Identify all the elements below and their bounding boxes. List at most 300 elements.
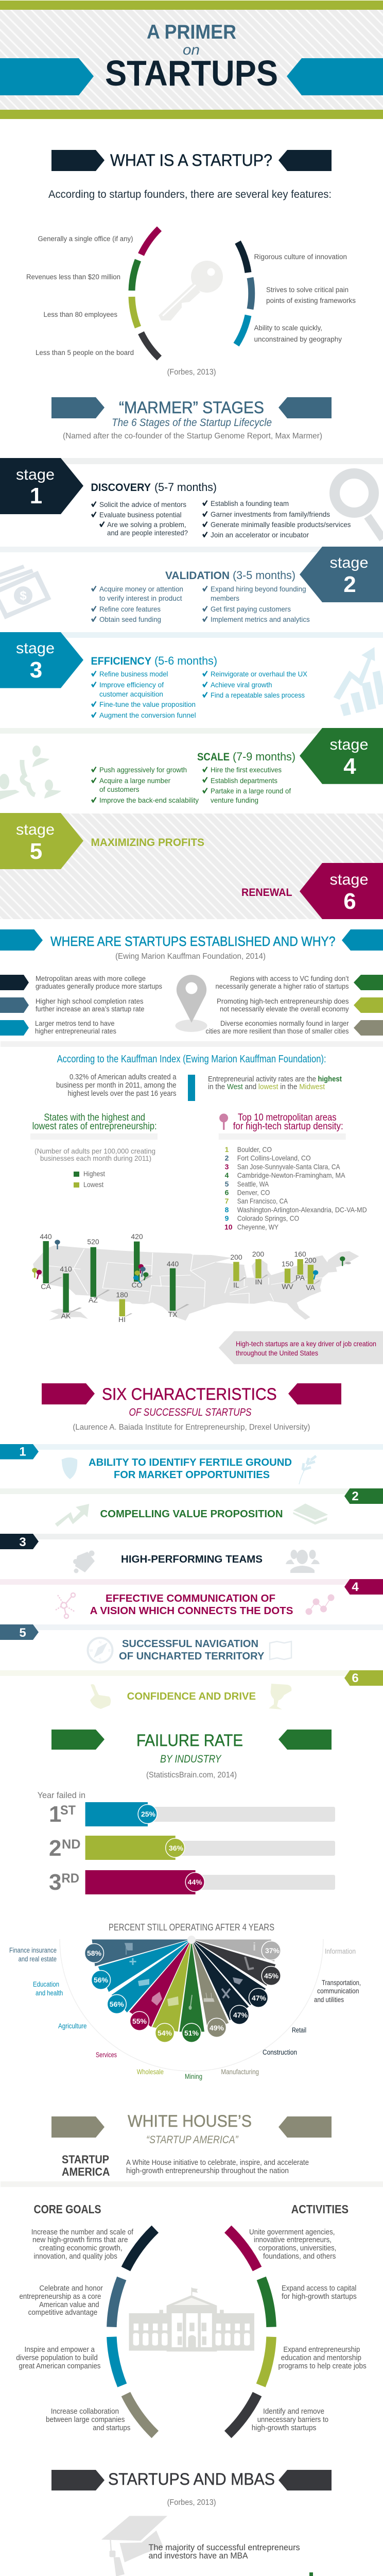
activities text: unnecessary barriers to: [257, 2416, 328, 2424]
bar values: AK: [61, 1312, 71, 1320]
core goals text: creating economic growth,: [39, 2244, 123, 2252]
right factors: necessarily generate a higher ratio of startups: [215, 982, 349, 990]
icon: connected dots: [306, 1594, 335, 1615]
heading: marmer stages: [51, 397, 332, 440]
bar values: VA: [306, 1283, 315, 1292]
panel: stage 1 discovery: Solicit the advice of mentors: [99, 500, 186, 509]
states heading: States with the highest and: [44, 1112, 145, 1123]
key features ring: [132, 229, 252, 358]
icon: puzzle piece: [73, 1551, 95, 1573]
title text: A PRIMER: [147, 21, 236, 43]
industry labels: and utilities: [314, 1996, 344, 2004]
icon: magnifier: [335, 473, 383, 539]
heading: failure rate: BY INDUSTRY: [160, 1753, 222, 1765]
panel: stage 4 scale: SCALE: [197, 751, 230, 763]
panel: stage 2 validation: members: [211, 594, 239, 602]
icon: map: [270, 1641, 291, 1659]
activities text: [249, 2228, 367, 2432]
top 10 metros: 4: [225, 1171, 229, 1179]
kauffman facts: Entrepreneurial activity rates are the highest: [208, 1075, 342, 1083]
bar values: CO: [132, 1281, 143, 1289]
icon: compass: N: [99, 1641, 101, 1645]
top 10 metros: 2: [225, 1154, 229, 1162]
characteristic 5: 5: [19, 1626, 26, 1640]
title text: [105, 21, 278, 93]
map shape: [33, 1245, 359, 1320]
characteristic 1: FOR MARKET OPPORTUNITIES: [114, 1469, 270, 1481]
characteristic 3: [0, 1534, 383, 1573]
core goals text: entrepreneurship as a core: [20, 2293, 101, 2301]
industry labels: [9, 1946, 361, 2080]
core goals text: great American companies: [19, 2362, 101, 2370]
key feature labels: Less than 80 employees: [43, 311, 117, 318]
bar values: 160: [294, 1250, 306, 1258]
mba majority statement: [148, 2543, 300, 2561]
panel: stage 2 validation: Get first paying customers: [211, 605, 291, 613]
kauffman facts: 0.32% of American adults created a: [69, 1073, 177, 1081]
panel: stage 2 validation: stage: [329, 554, 369, 571]
icon: rising arrow: [55, 1504, 89, 1527]
radial chart: percent still operating: 55%: [132, 2017, 147, 2025]
activities text: programs to help create jobs: [278, 2362, 367, 2370]
intro text: According to startup founders, there are several key features:: [48, 189, 332, 200]
activities text: Identify and remove: [263, 2408, 324, 2416]
core goals text: and startups: [93, 2424, 130, 2432]
panel: stage 2 validation: (3-5 months): [233, 569, 295, 582]
row: second year: 36%: [169, 1844, 184, 1852]
startup america description: [62, 2153, 309, 2178]
panel: stage 4 scale: (7-9 months): [233, 750, 295, 763]
panel: stage 1 discovery: [0, 458, 383, 539]
activities text: Expand entrepreneurship: [283, 2346, 360, 2354]
left factors: [0, 975, 162, 1036]
right factors: Regions with access to VC funding don’t: [230, 975, 349, 982]
bar values: 420: [131, 1232, 143, 1241]
heading: failure rate: (StatisticsBrain.com, 2014): [146, 1771, 237, 1780]
icon: team of people: [286, 1550, 320, 1573]
icon: network: [56, 1593, 75, 1618]
radial chart: percent still operating: 51%: [184, 2029, 199, 2037]
industry labels: Construction: [263, 2048, 297, 2056]
row: second year: 2: [49, 1836, 61, 1861]
radial chart: percent still operating: 54%: [158, 2029, 172, 2037]
bar values: 200: [230, 1253, 242, 1261]
kauffman facts: [56, 1073, 342, 1101]
row: first year: ST: [60, 1803, 76, 1818]
industry labels: Manufacturing: [221, 2068, 259, 2076]
stage 5 maximizing profits: [0, 813, 204, 869]
core goals text: Increase the number and scale of: [31, 2228, 134, 2236]
heading: startups and mbas: [51, 2470, 332, 2507]
right factors: cities are more resilient than those of smaller cities: [206, 1027, 349, 1035]
map pins: [32, 1240, 351, 1283]
panel: stage 3 efficiency: stage: [16, 640, 55, 657]
radial chart heading: PERCENT STILL OPERATING AFTER 4 YEARS: [109, 1922, 274, 1933]
top 10 metros: Cambridge-Newton-Framingham, MA: [237, 1171, 345, 1179]
row: first year: 1: [49, 1802, 61, 1827]
bar values: CA: [41, 1282, 51, 1291]
characteristic 4: EFFECTIVE COMMUNICATION OF: [106, 1593, 275, 1604]
icon: compass: W: [90, 1649, 93, 1653]
left factors: Metropolitan areas with more college: [36, 975, 146, 982]
row: third year: [49, 1870, 335, 1895]
stage 6 renewal: RENEWAL: [241, 887, 292, 899]
characteristic 6: CONFIDENCE AND DRIVE: [127, 1691, 256, 1702]
panel: stage 2 validation: VALIDATION: [165, 570, 230, 582]
key feature labels: Strives to solve critical pain: [266, 286, 349, 294]
industry labels: and health: [36, 1989, 63, 1997]
icon: thumbs up: [90, 1684, 111, 1709]
bar values: [40, 1232, 317, 1324]
citation: (Forbes, 2013): [167, 368, 216, 377]
wedge icons: i: [253, 1940, 256, 1953]
icon: banknote: $: [20, 589, 27, 603]
kauffman facts: business per month in 2011, among the: [56, 1081, 177, 1090]
core goals text: innovation, and quality jobs: [34, 2252, 117, 2261]
column headings: [34, 2202, 349, 2216]
core goals text: diverse population to build: [16, 2354, 98, 2362]
panel: stage 2 validation: Refine core features: [99, 605, 161, 613]
top 10 metros: [219, 1112, 367, 1231]
heading: where are startups established: [0, 929, 383, 961]
bar values: 410: [60, 1265, 72, 1273]
key feature labels: points of existing frameworks: [266, 297, 356, 304]
panel: stage 3 efficiency: customer acquisition: [99, 690, 163, 698]
heading: white house: “STARTUP AMERICA”: [146, 2134, 238, 2146]
bars: [43, 1241, 176, 1313]
top 10 metros: Colorado Springs, CO: [237, 1214, 299, 1223]
bar values: WV: [282, 1282, 293, 1291]
heading: white house: WHITE HOUSE’S: [128, 2112, 252, 2130]
industry labels: Finance insurance: [9, 1946, 57, 1954]
radial chart: percent still operating: 56%: [110, 2000, 124, 2008]
heading: failure rate: [51, 1730, 332, 1780]
ring: core goals and activities: [112, 2229, 271, 2434]
bar values: TX: [168, 1310, 178, 1318]
left factors: further increase an area’s startup rate: [36, 1005, 144, 1013]
panel: stage 4 scale: stage: [329, 736, 369, 753]
bar values: 520: [87, 1238, 99, 1246]
bar values: 440: [40, 1232, 52, 1241]
kauffman index heading: According to the Kauffman Index (Ewing Marion Kauffman Foundation):: [57, 1054, 326, 1065]
panel: stage 4 scale: Partake in a large round of: [211, 787, 291, 795]
top 10 metros: for high-tech startup density:: [233, 1121, 343, 1132]
icon: pink pin: [219, 1114, 228, 1130]
bar chart: year failed: Year failed in: [38, 1790, 85, 1800]
bar values: 150: [282, 1260, 293, 1268]
industry labels: Wholesale: [137, 2068, 164, 2076]
core goals text: Increase collaboration: [51, 2408, 119, 2416]
startup america description: STARTUP: [62, 2153, 109, 2166]
activities text: for high-growth startups: [282, 2293, 357, 2301]
characteristic 6: 6: [352, 1671, 359, 1685]
panel: stage 1 discovery: Generate minimally feasible products/services: [211, 520, 351, 529]
icon: trophy: [269, 1684, 291, 1709]
mba majority statement: and investors have an MBA: [148, 2551, 248, 2561]
wedge icons: [125, 1940, 256, 2010]
kauffman facts: in the West and lowest in the Midwest: [208, 1082, 325, 1091]
panel: stage 3 efficiency: Fine-tune the value proposition: [99, 700, 196, 708]
bar values: AZ: [89, 1296, 98, 1304]
characteristic 1: ABILITY TO IDENTIFY FERTILE GROUND: [89, 1457, 292, 1468]
industry labels: Agriculture: [58, 2022, 86, 2030]
mba majority statement: The majority of successful entrepreneurs: [148, 2543, 300, 2552]
fact: research access: [205, 2572, 383, 2576]
industry labels: Retail: [292, 2026, 306, 2034]
characteristic 5: OF UNCHARTED TERRITORY: [119, 1651, 265, 1662]
column headings: ACTIVITIES: [291, 2202, 349, 2216]
characteristic 2: [0, 1488, 383, 1527]
heading: white house: [51, 2112, 332, 2146]
core goals text: between large companies: [46, 2416, 125, 2424]
industry labels: communication: [317, 1987, 359, 1995]
states heading: (Number of adults per 100,000 creating: [34, 1147, 155, 1155]
industry labels: Education: [33, 1980, 59, 1988]
us map with state bars: [32, 1232, 359, 1324]
panel: stage 3 efficiency: 3: [30, 657, 42, 683]
legend: [74, 1170, 105, 1189]
heading: six characteristics: [42, 1383, 341, 1432]
stage 5 maximizing profits: 5: [30, 839, 42, 864]
title text: on: [183, 42, 200, 58]
icon: graduation cap: [101, 2516, 167, 2576]
top 10 metros: Cheyenne, WY: [237, 1223, 279, 1231]
row: third year: 44%: [188, 1878, 202, 1886]
panel: stage 1 discovery: DISCOVERY: [91, 482, 151, 494]
stage 5 maximizing profits: MAXIMIZING PROFITS: [91, 837, 204, 849]
title banner: [0, 0, 383, 120]
radial chart: percent still operating: [9, 1936, 361, 2080]
panel: stage 3 efficiency: Reinvigorate or overhaul the UX: [211, 670, 308, 678]
panel: stage 4 scale: Acquire a large number: [99, 776, 170, 785]
icon: money stack: [293, 1503, 328, 1524]
heading: startups and mbas: (Forbes, 2013): [167, 2498, 216, 2507]
panel: stage 1 discovery: Evaluate business potential: [99, 511, 182, 519]
kauffman facts: highest levels over the past 16 years: [68, 1089, 176, 1098]
bar values: 200: [304, 1256, 317, 1264]
characteristic 1: 1: [19, 1445, 26, 1459]
panel: stage 3 efficiency: Refine business model: [99, 670, 168, 678]
icon: white house: [129, 2287, 254, 2351]
activities text: high-growth startups: [252, 2424, 316, 2432]
startup america description: AMERICA: [62, 2165, 110, 2178]
industry labels: Services: [96, 2051, 117, 2059]
industry labels: Transportation,: [322, 1979, 361, 1987]
industry labels: Information: [325, 1947, 356, 1955]
icon: compass: [88, 1638, 112, 1663]
panel: stage 3 efficiency: Augment the conversion funnel: [99, 711, 196, 719]
heading: six characteristics: SIX CHARACTERISTICS: [102, 1385, 277, 1403]
heading: where are startups established: WHERE ARE STARTUPS ESTABLISHED AND WHY?: [50, 934, 336, 949]
icon: banknote: [0, 565, 51, 619]
panel: stage 1 discovery: (5-7 months): [154, 481, 217, 494]
top 10 metros: 9: [225, 1214, 229, 1223]
row: first year: [49, 1802, 335, 1827]
callout: job creation: [219, 1331, 383, 1364]
panel: stage 4 scale: venture funding: [211, 796, 258, 804]
key feature labels: Less than 5 people on the board: [36, 349, 134, 357]
bar values: HI: [118, 1315, 126, 1324]
bar values: 200: [252, 1250, 264, 1258]
icon: key: [159, 261, 223, 320]
title text: STARTUPS: [105, 53, 278, 93]
heading: what is a startup: WHAT IS A STARTUP?: [110, 151, 272, 170]
startup america description: A White House initiative to celebrate, inspire, and accelerate: [126, 2158, 309, 2167]
states heading: [30, 1112, 158, 1162]
panel: stage 2 validation: Obtain seed funding: [99, 615, 161, 623]
top 10 metros: San Francisco, CA: [237, 1197, 288, 1205]
wedge icons: +: [129, 1954, 137, 1969]
panel: stages 5 and 6: [0, 813, 383, 919]
bar values: PA: [295, 1274, 305, 1282]
panel: stage 4 scale: Improve the back-end scalability: [99, 796, 199, 804]
key feature labels: Generally a single office (if any): [38, 235, 133, 243]
top 10 metros: 8: [225, 1206, 229, 1214]
row: second year: ND: [62, 1837, 80, 1852]
radial chart: percent still operating: 37%: [265, 1946, 280, 1955]
left factors: graduates generally produce more startups: [36, 982, 162, 990]
panel: stage 2 validation: Acquire money or attention: [99, 585, 183, 593]
panel: stage 4 scale: Establish departments: [211, 776, 277, 785]
panel: stage 1 discovery: Are we solving a problem,: [107, 520, 186, 529]
characteristic 4: [0, 1579, 383, 1618]
characteristic 4: 4: [352, 1580, 359, 1594]
core goals text: new high-growth firms that are: [32, 2236, 128, 2244]
radial chart: percent still operating: 47%: [252, 1994, 267, 2002]
core goals text: Celebrate and honor: [39, 2284, 103, 2293]
core goals text: American value and: [39, 2301, 99, 2309]
panel: stage 3 efficiency: EFFICIENCY: [91, 655, 151, 667]
characteristic 4: A VISION WHICH CONNECTS THE DOTS: [90, 1605, 293, 1617]
panel: stage 2 validation: [0, 547, 383, 623]
icon: acorn: [62, 1458, 77, 1479]
key feature labels: Ability to scale quickly,: [254, 324, 322, 332]
top 10 metros: Top 10 metropolitan areas: [238, 1112, 337, 1123]
heading: marmer stages: “MARMER” STAGES: [119, 398, 264, 417]
heading: failure rate: FAILURE RATE: [136, 1731, 243, 1750]
icon: compass: S: [99, 1658, 101, 1662]
heading: what is a startup: [51, 150, 332, 171]
wedges: [92, 1939, 276, 2032]
left factors: Higher high school completion rates: [36, 997, 144, 1005]
characteristic 3: 3: [19, 1535, 26, 1549]
radial chart: percent still operating: 56%: [94, 1976, 109, 1984]
panel: stage 4 scale: 4: [343, 754, 356, 779]
column headings: CORE GOALS: [34, 2202, 101, 2216]
radial chart: percent still operating: 58%: [87, 1949, 102, 1957]
core goals text: [16, 2228, 134, 2432]
right factors: Promoting high-tech entrepreneurship does: [217, 997, 349, 1005]
right factors: Diverse economies normally found in larger: [220, 1020, 349, 1027]
legend: Lowest: [83, 1180, 103, 1189]
radial chart: percent still operating: 47%: [233, 2011, 248, 2019]
heading: six characteristics: (Laurence A. Baiada Institute for Entrepreneurship, Drexel University): [73, 1423, 310, 1432]
icon: location pin: [175, 975, 207, 1032]
activities text: Expand access to capital: [282, 2284, 356, 2293]
top 10 metros: San Jose-Sunnyvale-Santa Clara, CA: [237, 1162, 340, 1171]
icon: wheat: [299, 1456, 316, 1484]
top 10 metros: 6: [225, 1188, 229, 1196]
key feature labels: Rigorous culture of innovation: [254, 253, 347, 261]
panel: stage 4 scale: of customers: [99, 785, 139, 793]
top 10 metros: Washington-Arlington-Alexandria, DC-VA-MD: [237, 1206, 367, 1214]
panel: stage 3 efficiency: Achieve viral growth: [211, 681, 272, 689]
key feature labels: [26, 235, 356, 357]
activities text: education and mentorship: [281, 2354, 361, 2362]
panel: stage 1 discovery: 1: [30, 483, 42, 509]
row: first year: 25%: [141, 1810, 156, 1818]
activities text: foundations, and others: [263, 2252, 336, 2261]
characteristic 1: [0, 1444, 383, 1484]
stage 6 renewal: stage: [329, 871, 369, 888]
top 10 metros: 5: [225, 1180, 229, 1188]
heading: marmer stages: The 6 Stages of the Startup Lifecycle: [112, 417, 272, 429]
top 10 metros: 1: [225, 1145, 229, 1154]
right factors: [206, 975, 383, 1036]
icon: connected people: [0, 745, 61, 800]
left factors: Larger metros tend to have: [35, 1020, 114, 1027]
top 10 metros: 10: [224, 1223, 233, 1231]
left factors: higher entrepreneurial rates: [35, 1027, 116, 1035]
heading: where are startups established: (Ewing Marion Kauffman Foundation, 2014): [115, 952, 266, 961]
top 10 metros: Boulder, CO: [237, 1145, 272, 1154]
panel: stage 1 discovery: Establish a founding team: [211, 499, 289, 507]
row: third year: 3: [49, 1870, 61, 1895]
bar values: IL: [233, 1281, 239, 1289]
activities text: corporations, universities,: [258, 2244, 336, 2252]
right factors: not necessarily elevate the overall economy: [220, 1005, 349, 1013]
radial chart: percent still operating: 45%: [264, 1972, 279, 1980]
heading: marmer stages: (Named after the co-founder of the Startup Genome Report, Max Marmer): [63, 432, 322, 440]
callout: job creation: throughout the United States: [236, 1349, 318, 1357]
bar values: 440: [167, 1260, 179, 1268]
top 10 metros: Seattle, WA: [237, 1180, 269, 1188]
states heading: businesses each month during 2011): [40, 1154, 151, 1162]
bar values: 180: [116, 1291, 128, 1299]
key feature labels: unconstrained by geography: [254, 335, 342, 343]
icon: compass: E: [109, 1649, 111, 1653]
states heading: lowest rates of entrepreneurship:: [32, 1121, 157, 1132]
activities text: Unite government agencies,: [249, 2228, 335, 2236]
panel: stage 4 scale: Hire the first executives: [211, 766, 282, 774]
legend: Highest: [83, 1170, 105, 1178]
stage 6 renewal: [241, 863, 383, 919]
panel: stage 3 efficiency: [0, 632, 383, 719]
icon: growth chart: [334, 647, 383, 716]
startup america description: high-growth entrepreneurship throughout the nation: [126, 2166, 289, 2175]
key feature labels: Revenues less than $20 million: [26, 273, 120, 281]
top 10 metros: 7: [225, 1197, 229, 1205]
characteristic 2: COMPELLING VALUE PROPOSITION: [100, 1509, 283, 1520]
panel: stage 1 discovery: Garner investments from family/friends: [211, 510, 330, 518]
stage 5 maximizing profits: stage: [16, 821, 55, 838]
panel: stage 1 discovery: and are people interested?: [107, 529, 188, 537]
panel: stage 3 efficiency: Find a repeatable sales process: [211, 691, 305, 699]
panel: stage 2 validation: Implement metrics and analytics: [211, 615, 310, 623]
panel: stage 1 discovery: Join an accelerator or incubator: [211, 531, 309, 539]
top 10 metros: 3: [225, 1162, 229, 1171]
characteristic 5: SUCCESSFUL NAVIGATION: [122, 1638, 258, 1650]
panel: stage 3 efficiency: (5-6 months): [154, 654, 217, 667]
icon: books: [303, 2572, 321, 2576]
row: third year: RD: [62, 1871, 79, 1886]
panel: stage 2 validation: Expand hiring beyond founding: [211, 585, 306, 593]
stage 6 renewal: 6: [343, 889, 356, 914]
bar values: IN: [255, 1278, 263, 1286]
heading: six characteristics: OF SUCCESSFUL STARTUPS: [129, 1406, 251, 1418]
row: second year: [49, 1836, 335, 1861]
bar chart: year failed: [38, 1790, 335, 1895]
